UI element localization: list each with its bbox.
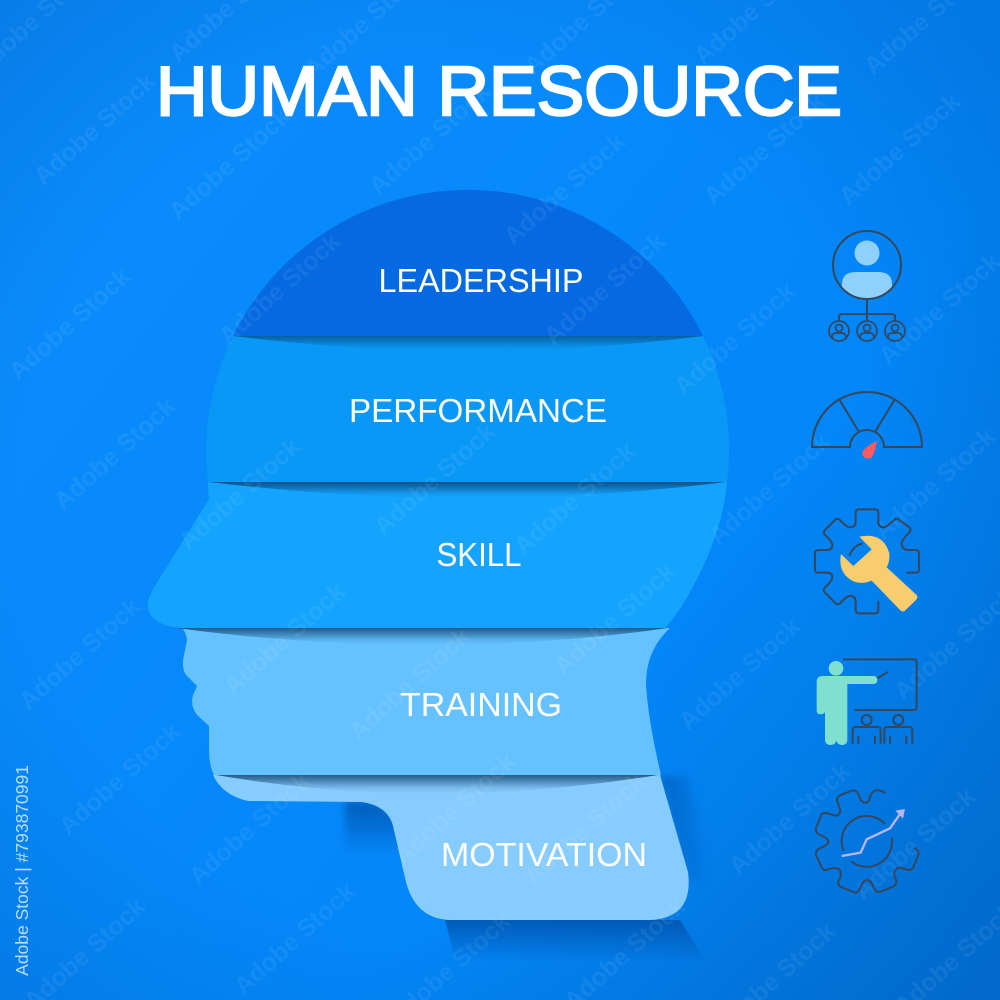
icon: gear with wrench bbox=[815, 509, 919, 613]
watermarks: Adobe Stock bbox=[499, 127, 631, 251]
band: performance bbox=[206, 336, 729, 482]
band: training bbox=[176, 628, 670, 775]
watermarks: Adobe Stock bbox=[344, 622, 476, 746]
watermarks: Adobe Stock bbox=[834, 87, 966, 211]
watermarks: Adobe Stock bbox=[184, 767, 316, 891]
watermarks: Adobe Stock bbox=[724, 757, 856, 881]
cast shadows behind head bbox=[345, 776, 712, 962]
watermarks: Adobe Stock bbox=[369, 417, 501, 541]
icon: gear with growth arrow bbox=[816, 790, 919, 893]
watermarks: Adobe Stock bbox=[174, 432, 306, 556]
label: leadership: LEADERSHIP bbox=[378, 262, 584, 299]
watermarks: Adobe Stock bbox=[214, 227, 346, 351]
watermarks: Adobe Stock bbox=[29, 67, 161, 191]
watermarks: Adobe Stock bbox=[49, 392, 181, 516]
icon: leader with team bbox=[829, 231, 905, 341]
watermarks: Adobe Stock bbox=[674, 612, 806, 736]
watermarks: Adobe Stock bbox=[219, 577, 351, 701]
watermarks: Adobe Stock bbox=[704, 427, 836, 551]
watermarks: Adobe Stock bbox=[669, 277, 801, 401]
watermarks: Adobe Stock bbox=[14, 592, 146, 716]
head silhouette bbox=[148, 190, 729, 962]
watermarks: Adobe Stock bbox=[4, 262, 136, 386]
label: skill: SKILL bbox=[436, 536, 522, 573]
watermarks: Adobe Stock bbox=[849, 782, 981, 906]
stock id: Adobe Stock | #793870991 bbox=[12, 765, 32, 976]
title: HUMAN RESOURCE bbox=[156, 52, 842, 130]
band: skill bbox=[148, 482, 727, 628]
label: training: TRAINING bbox=[400, 686, 562, 723]
watermarks: Adobe Stock bbox=[549, 557, 681, 681]
watermarks: Adobe Stock bbox=[229, 877, 361, 1000]
band: leadership bbox=[233, 190, 703, 336]
watermarks: Adobe Stock bbox=[389, 747, 521, 871]
watermarks: Adobe Stock bbox=[869, 422, 1000, 546]
icon: gauge bbox=[812, 392, 922, 459]
band: motivation bbox=[213, 775, 689, 920]
label: performance: PERFORMANCE bbox=[349, 392, 607, 429]
watermarks: Adobe Stock bbox=[509, 437, 641, 561]
watermarks: Adobe Stock bbox=[539, 227, 671, 351]
label: motivation: MOTIVATION bbox=[441, 836, 647, 873]
watermarks: Adobe Stock bbox=[164, 102, 296, 226]
watermarks: Adobe Stock bbox=[364, 77, 496, 201]
icon: trainer with audience bbox=[817, 659, 917, 745]
watermarks: Adobe Stock bbox=[699, 87, 831, 211]
watermarks: Adobe Stock bbox=[519, 767, 651, 891]
watermarks: Adobe Stock bbox=[54, 717, 186, 841]
